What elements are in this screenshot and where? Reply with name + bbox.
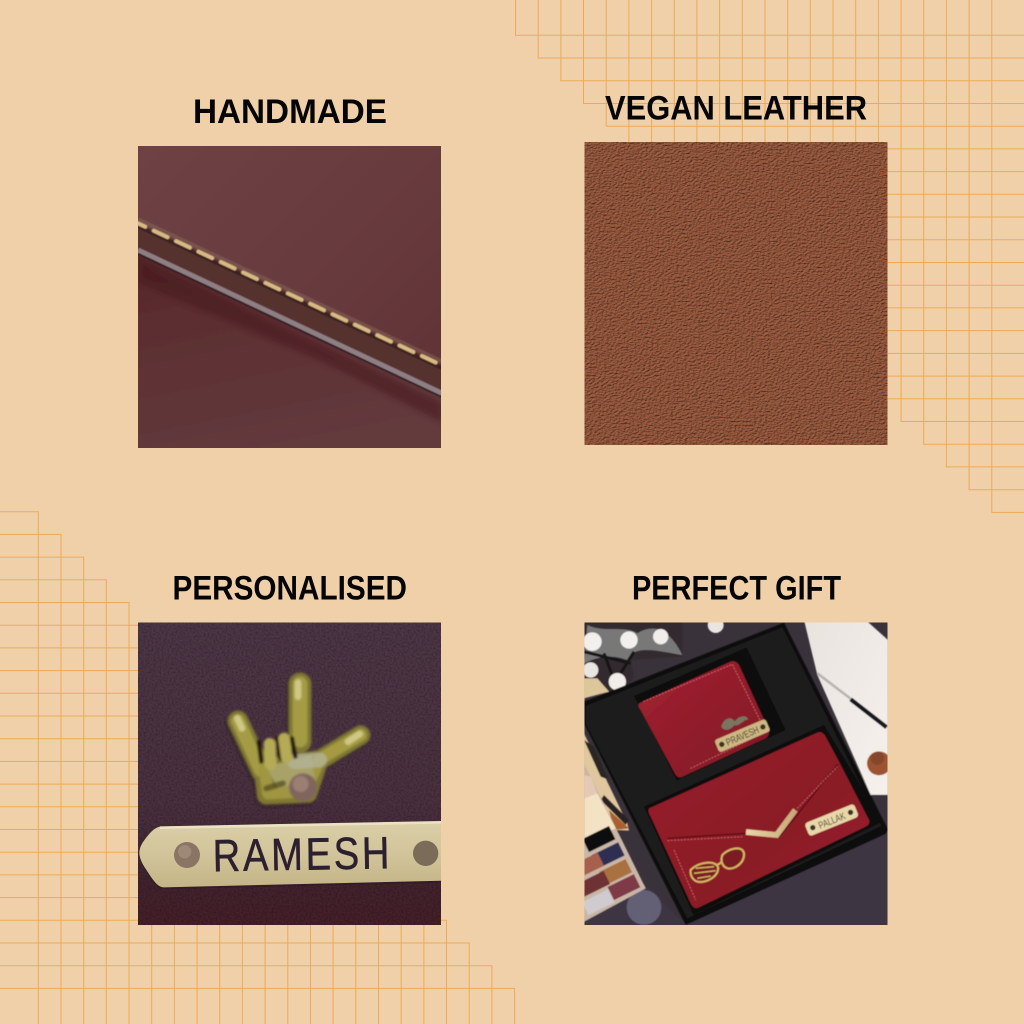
heading: handmade: HANDMADE (193, 93, 387, 131)
makeup palette (584, 765, 646, 922)
panel: perfect gift box photo (571, 617, 891, 926)
panel: vegan leather texture photo (584, 142, 888, 445)
nameplate: Pallak (804, 804, 859, 836)
backdrop objects (584, 620, 891, 926)
decorative grid: top right (516, 0, 1024, 512)
heading: vegan leather: VEGAN LEATHER (605, 90, 867, 128)
nameplate: Pravesh: PRAVESH (725, 725, 761, 749)
gold chevron clasp (746, 810, 795, 835)
large red clutch (648, 732, 869, 908)
panel: personalised nameplate photo (138, 622, 442, 925)
heading: perfect gift: PERFECT GIFT (632, 570, 841, 608)
nameplate: Ramesh: RAMESH (212, 827, 390, 881)
decorative grid: bottom left (0, 512, 515, 1024)
icon: love-you hand charm (236, 683, 361, 801)
panel: handmade stitched leather photo (138, 146, 442, 450)
small red wallet (638, 661, 770, 777)
icon: sunglasses (691, 848, 744, 882)
cotton flowers (583, 617, 724, 698)
nameplate: Ramesh (139, 821, 442, 889)
heading: personalised: PERSONALISED (172, 570, 407, 608)
gift box (584, 623, 888, 925)
nameplate: Pallak: PALLAK (817, 811, 847, 832)
icon: moustache (721, 716, 748, 730)
